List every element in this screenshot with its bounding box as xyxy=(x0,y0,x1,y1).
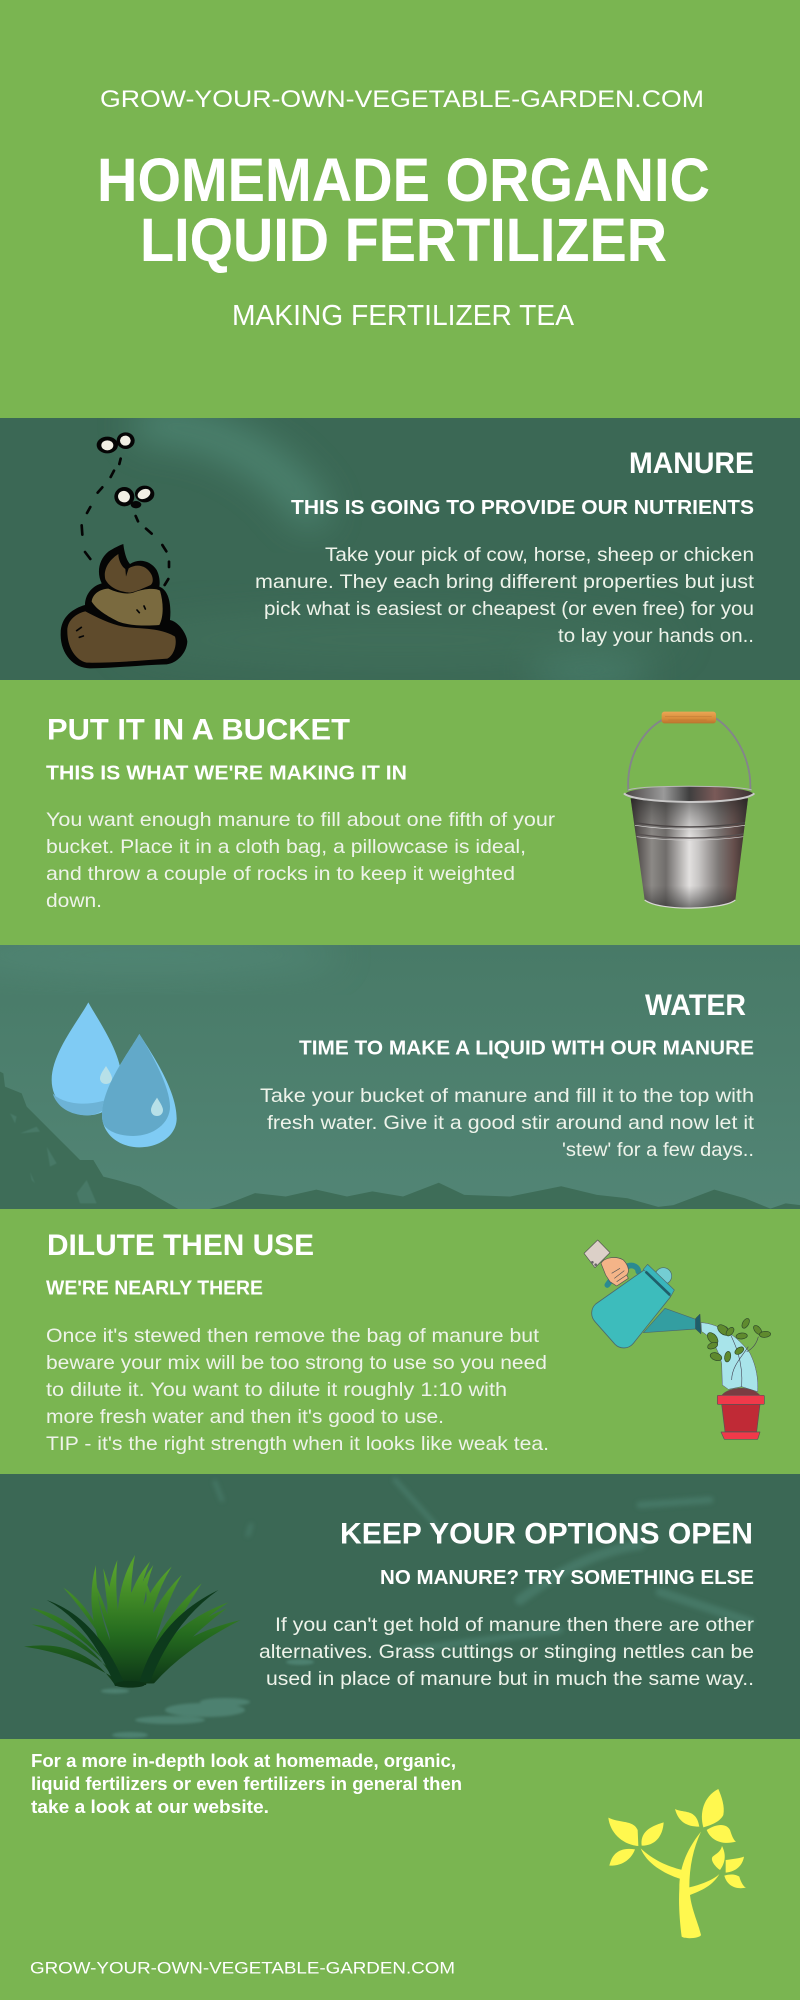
panel: keep your options open xyxy=(0,1474,800,1739)
body text: down. xyxy=(46,890,102,912)
panel: manure xyxy=(0,418,800,690)
panel: dilute then use xyxy=(46,1229,771,1455)
body text: alternatives. Grass cuttings or stinging nettles can be xyxy=(259,1641,754,1663)
title: LIQUID FERTILIZER xyxy=(140,206,667,274)
icon: grass tuft xyxy=(24,1555,241,1688)
icon: water drops xyxy=(52,1002,177,1147)
icon: watering can and plant pot xyxy=(584,1240,771,1439)
heading: DILUTE THEN USE xyxy=(47,1229,314,1262)
panel background with mountains xyxy=(0,935,800,1212)
call to action text xyxy=(31,1751,462,1817)
body text: bucket. Place it in a cloth bag, a pillowcase is ideal, xyxy=(46,836,526,858)
panel: put it in a bucket xyxy=(46,712,754,912)
subtitle: MAKING FERTILIZER TEA xyxy=(232,300,575,332)
subheading: TIME TO MAKE A LIQUID WITH OUR MANURE xyxy=(299,1038,754,1060)
body text xyxy=(255,544,755,647)
footer xyxy=(30,1751,746,1978)
icon: metal bucket xyxy=(624,712,754,908)
heading: PUT IT IN A BUCKET xyxy=(47,714,350,746)
header xyxy=(97,86,710,332)
call to action text: take a look at our website. xyxy=(31,1797,269,1817)
body text: TIP - it's the right strength when it looks like weak tea. xyxy=(46,1433,549,1455)
icon: poop with flies xyxy=(61,432,187,668)
body text: Once it's stewed then remove the bag of manure but xyxy=(46,1325,540,1347)
title: HOMEMADE ORGANIC xyxy=(97,146,710,214)
site url: GROW-YOUR-OWN-VEGETABLE-GARDEN.COM xyxy=(30,1958,455,1978)
site url: GROW-YOUR-OWN-VEGETABLE-GARDEN.COM xyxy=(100,86,704,113)
body text: fresh water. Give it a good stir around and now let it xyxy=(267,1112,755,1134)
body text xyxy=(260,1085,755,1161)
heading: WATER xyxy=(645,989,746,1022)
call to action text: liquid fertilizers or even fertilizers in general then xyxy=(31,1774,462,1794)
body text: and throw a couple of rocks in to keep it weighted xyxy=(46,863,515,885)
body text: Take your pick of cow, horse, sheep or chicken xyxy=(325,544,754,566)
body text: to dilute it. You want to dilute it roughly 1:10 with xyxy=(46,1379,507,1401)
body text: used in place of manure but in much the same way.. xyxy=(266,1668,754,1690)
panel: water xyxy=(0,935,800,1212)
call to action text: For a more in-depth look at homemade, organic, xyxy=(31,1751,456,1771)
body text xyxy=(46,1325,549,1455)
title xyxy=(97,146,710,274)
heading: KEEP YOUR OPTIONS OPEN xyxy=(340,1518,753,1551)
body text xyxy=(259,1614,755,1690)
panel background xyxy=(0,1474,800,1739)
body text: If you can't get hold of manure then there are other xyxy=(275,1614,755,1636)
heading: MANURE xyxy=(629,447,754,480)
body text: pick what is easiest or cheapest (or even free) for you xyxy=(264,598,754,620)
subheading: WE'RE NEARLY THERE xyxy=(46,1278,263,1300)
body text: Take your bucket of manure and fill it to the top with xyxy=(260,1085,754,1107)
body text xyxy=(46,809,556,912)
body text: manure. They each bring different properties but just xyxy=(255,571,755,593)
body text: more fresh water and then it's good to use. xyxy=(46,1406,444,1428)
subheading: THIS IS WHAT WE'RE MAKING IT IN xyxy=(46,762,407,784)
subheading: NO MANURE? TRY SOMETHING ELSE xyxy=(380,1567,754,1589)
subheading: THIS IS GOING TO PROVIDE OUR NUTRIENTS xyxy=(291,497,754,519)
body text: You want enough manure to fill about one fifth of your xyxy=(46,809,556,831)
body text: beware your mix will be too strong to use so you need xyxy=(46,1352,547,1374)
panel background xyxy=(0,418,800,690)
icon: yellow tree xyxy=(608,1789,746,1938)
body text: to lay your hands on.. xyxy=(558,625,754,647)
body text: 'stew' for a few days.. xyxy=(562,1139,754,1161)
